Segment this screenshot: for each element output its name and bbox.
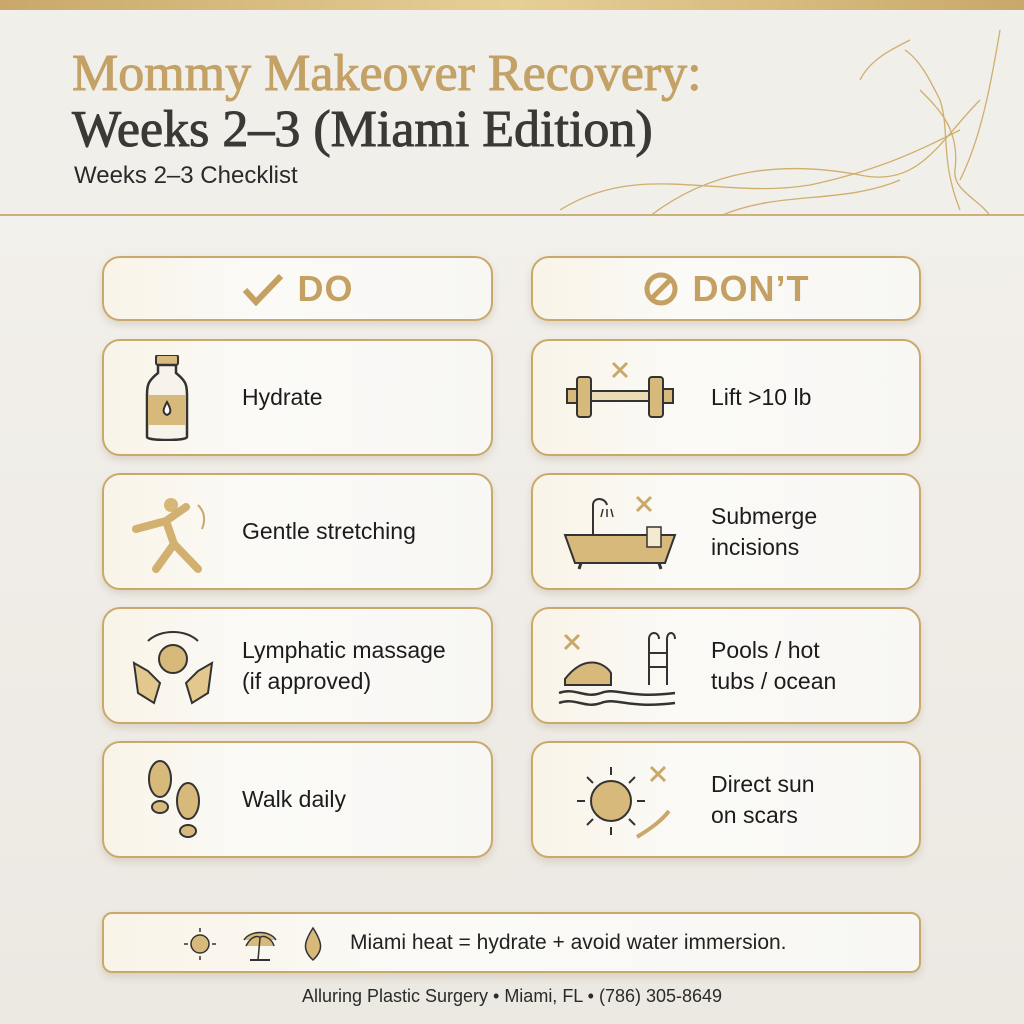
- title: [72, 45, 702, 158]
- card: hydrate: Hydrate: [242, 384, 323, 410]
- card: sun: Direct sun: [711, 770, 815, 796]
- subtitle: Weeks 2–3 Checklist: [74, 162, 298, 189]
- card: stretching: [102, 473, 493, 590]
- icon: stretching figure: [132, 498, 206, 573]
- icon: sun: [577, 766, 670, 839]
- DO header: [102, 256, 493, 321]
- card: lymphatic: Lymphatic massage: [242, 636, 446, 662]
- DONT header: [531, 256, 921, 321]
- card: pools: [531, 607, 921, 724]
- card: lift: [531, 339, 921, 456]
- card: lymphatic: [102, 607, 493, 724]
- title: Mommy Makeover Recovery:: [72, 45, 702, 102]
- card: submerge: incisions: [711, 534, 799, 560]
- icon: waves and ladder: [558, 632, 676, 706]
- header band: [0, 10, 1024, 216]
- card: lift: Lift >10 lb: [711, 384, 811, 410]
- card: walk: [102, 741, 493, 858]
- card: pools: Pools / hot: [711, 636, 820, 662]
- card: submerge: Submerge: [711, 502, 817, 528]
- icon: bathtub: [564, 496, 676, 570]
- footer callout: Miami heat = hydrate + avoid water immersion.: [350, 930, 787, 954]
- icon: bottle: [146, 355, 188, 441]
- title: Weeks 2–3 (Miami Edition): [72, 101, 653, 158]
- card: sun: [531, 741, 921, 858]
- card: walk: Walk daily: [242, 786, 346, 812]
- footer text: Alluring Plastic Surgery • Miami, FL • (786) 305-8649: [302, 986, 722, 1006]
- card: lymphatic: (if approved): [242, 668, 371, 694]
- decorative figure line art: [560, 30, 1001, 216]
- card: stretching: Gentle stretching: [242, 518, 416, 544]
- icon: dumbbell with x: [566, 362, 674, 418]
- DO header: DO: [298, 268, 354, 308]
- icon: hands with circle: [132, 631, 214, 704]
- card: pools: tubs / ocean: [711, 668, 836, 694]
- DONT header: DON’T: [692, 268, 810, 308]
- card: hydrate: [102, 339, 493, 456]
- footer callout: [102, 912, 921, 973]
- card: sun: on scars: [711, 802, 798, 828]
- card: submerge: [531, 473, 921, 590]
- icon: footprints: [148, 760, 200, 838]
- top gold bar: [0, 0, 1024, 10]
- icons: sun palm drop: [184, 926, 322, 961]
